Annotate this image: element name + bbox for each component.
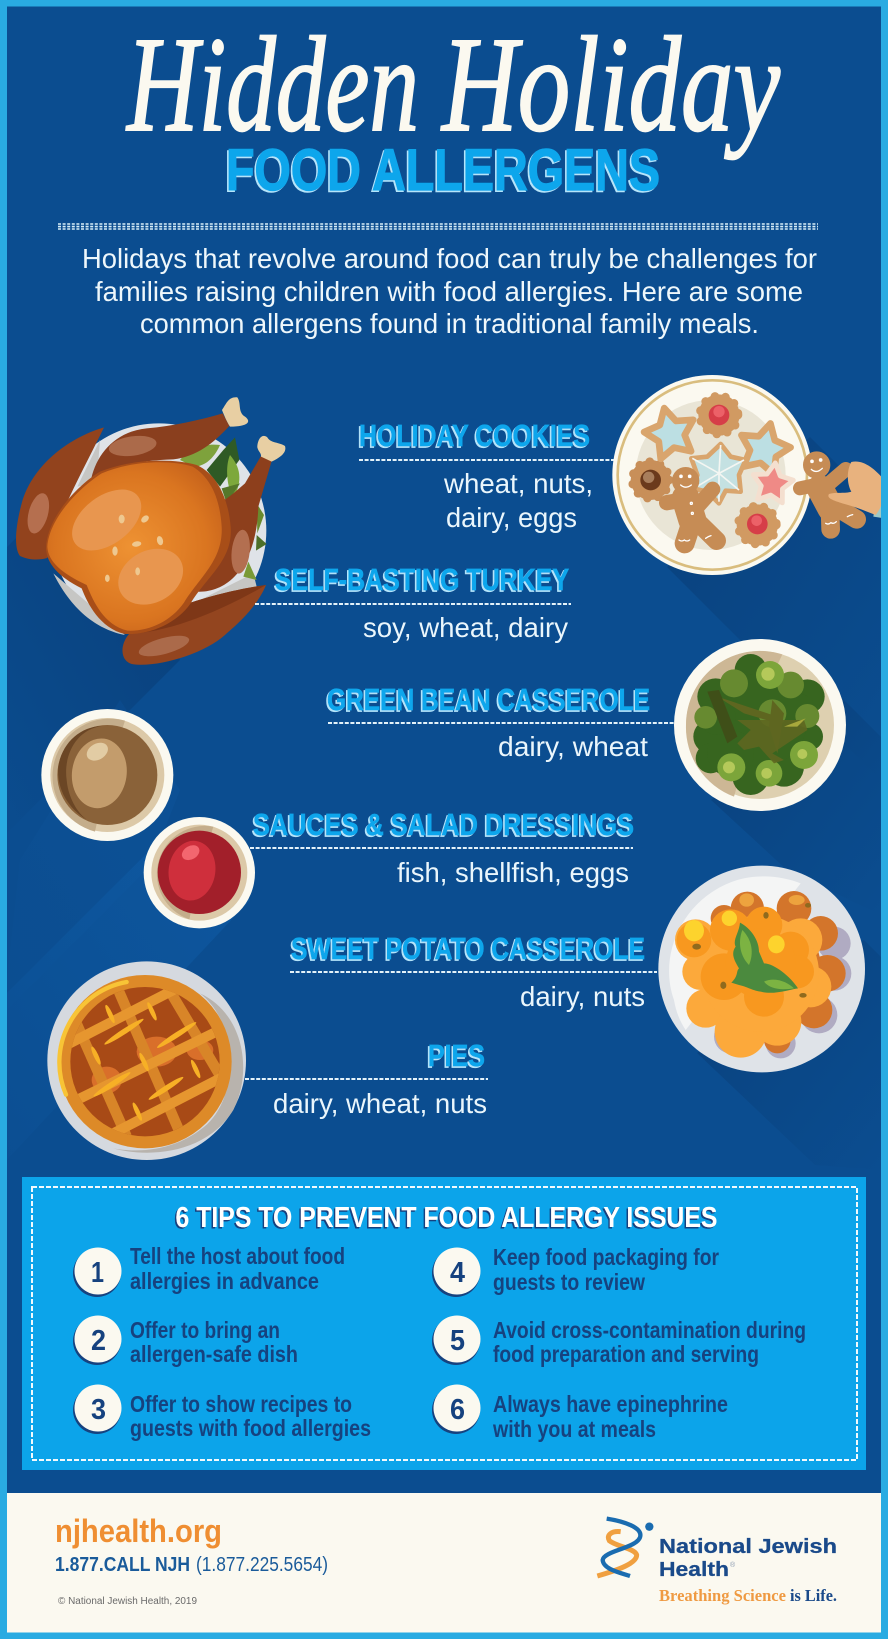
tip 6: 6 (450, 1394, 465, 1426)
illustration: turkey on plate (16, 397, 285, 665)
National Jewish Health logo (597, 1519, 837, 1605)
intro text (82, 243, 817, 339)
logo mark: helix (597, 1519, 653, 1576)
section: self-basting turkey (255, 562, 571, 643)
tip 4: guests to review (493, 1269, 645, 1295)
tip 5: Avoid cross-contamination during (493, 1317, 806, 1343)
tip 1 (73, 1243, 345, 1297)
tip 5: 5 (450, 1325, 465, 1357)
left wing (16, 427, 104, 560)
title (126, 10, 780, 160)
tip 4: Keep food packaging for (493, 1244, 719, 1270)
tip 2: allergen-safe dish (130, 1341, 298, 1367)
National Jewish Health logo: National Jewish (659, 1535, 837, 1558)
section: self-basting turkey: SELF-BASTING TURKEY (275, 562, 569, 597)
title: Holiday (440, 10, 780, 160)
tip 5: food preparation and serving (493, 1341, 759, 1367)
jam cookie bottom (737, 504, 778, 546)
section: holiday cookies (359, 418, 614, 533)
National Jewish Health logo: is Life. (790, 1586, 837, 1605)
tip 6: with you at meals (492, 1416, 656, 1442)
tip 3: guests with food allergies (130, 1415, 371, 1441)
hand (828, 461, 888, 519)
tip 1: Tell the host about food (130, 1243, 345, 1269)
section: sauces and salad dressings: SAUCES & SALAD DRESSINGS (253, 807, 634, 842)
section: green bean casserole (327, 682, 674, 762)
National Jewish Health logo: ® (730, 1561, 736, 1569)
illustration: cranberry sauce bowl (144, 817, 255, 928)
top leg (91, 413, 229, 482)
panel: six tips (22, 1177, 866, 1470)
right leg (197, 456, 272, 592)
National Jewish Health logo: Health (659, 1558, 729, 1581)
body (46, 461, 231, 634)
tip 6 (432, 1384, 728, 1442)
section: holiday cookies: wheat, nuts, (443, 468, 593, 499)
tip 6: Always have epinephrine (493, 1391, 728, 1417)
tip 1: 1 (91, 1257, 104, 1289)
intro text: families raising children with food allergies. Here are some (95, 276, 803, 307)
section: sauces and salad dressings (250, 807, 634, 888)
tip 2: Offer to bring an (130, 1317, 280, 1343)
intro text: common allergens found in traditional family meals. (140, 308, 759, 339)
footer contact details: (1.877.225.5654) (196, 1554, 328, 1576)
jam cookie top (698, 394, 740, 436)
tip 4 (432, 1244, 719, 1297)
section: self-basting turkey: soy, wheat, dairy (363, 612, 568, 643)
illustration: sweet potato casserole (658, 866, 865, 1072)
gingerbread man 2 (800, 458, 857, 529)
subtitle: FOOD ALLERGENS (226, 138, 660, 203)
footer panel (7, 1493, 881, 1633)
title: Hidden (126, 10, 419, 160)
tip 2 (73, 1316, 298, 1367)
footer contact details (55, 1513, 328, 1607)
section: green bean casserole: dairy, wheat (498, 731, 648, 762)
section: green bean casserole: GREEN BEAN CASSEROLE (327, 682, 650, 717)
long shadows behind the food (7, 437, 881, 1170)
tips heading: 6 TIPS TO PREVENT FOOD ALLERGY ISSUES (176, 1202, 718, 1234)
section: holiday cookies: HOLIDAY COOKIES (359, 418, 590, 453)
tip 3: 3 (91, 1394, 106, 1426)
section: holiday cookies: dairy, eggs (446, 502, 577, 533)
tip 2: 2 (91, 1325, 106, 1357)
illustration: green bean casserole (674, 639, 846, 811)
bottom wing (122, 585, 266, 665)
choc cookie (631, 460, 671, 500)
illustration: lattice pie (47, 961, 246, 1160)
tip 3 (73, 1384, 371, 1441)
section: sauces and salad dressings: fish, shellfish, eggs (397, 857, 629, 888)
footer contact details: njhealth.org (55, 1513, 222, 1549)
tip 5 (432, 1316, 806, 1367)
tip 3: Offer to show recipes to (130, 1391, 352, 1417)
section: sweet potato casserole: SWEET POTATO CASSEROLE (291, 931, 645, 966)
double dashed divider (58, 224, 818, 229)
gingerbread man 1 (667, 474, 717, 543)
intro text: Holidays that revolve around food can truly be challenges for (82, 243, 817, 274)
section: sweet potato casserole: dairy, nuts (520, 981, 645, 1012)
National Jewish Health logo: Breathing Science (659, 1586, 786, 1605)
illustration: cookie plate and hand (612, 375, 888, 575)
footer contact details: 1.877.CALL NJH (55, 1554, 190, 1576)
illustration: gravy bowl (41, 709, 173, 841)
star cookies (640, 402, 795, 504)
footer contact details: © National Jewish Health, 2019 (58, 1596, 197, 1607)
section: pies (245, 1038, 488, 1119)
section: sweet potato casserole (290, 931, 657, 1012)
section: pies: PIES (428, 1038, 485, 1073)
section: pies: dairy, wheat, nuts (273, 1088, 487, 1119)
tip 4: 4 (450, 1257, 465, 1289)
tip 1: allergies in advance (130, 1268, 319, 1294)
